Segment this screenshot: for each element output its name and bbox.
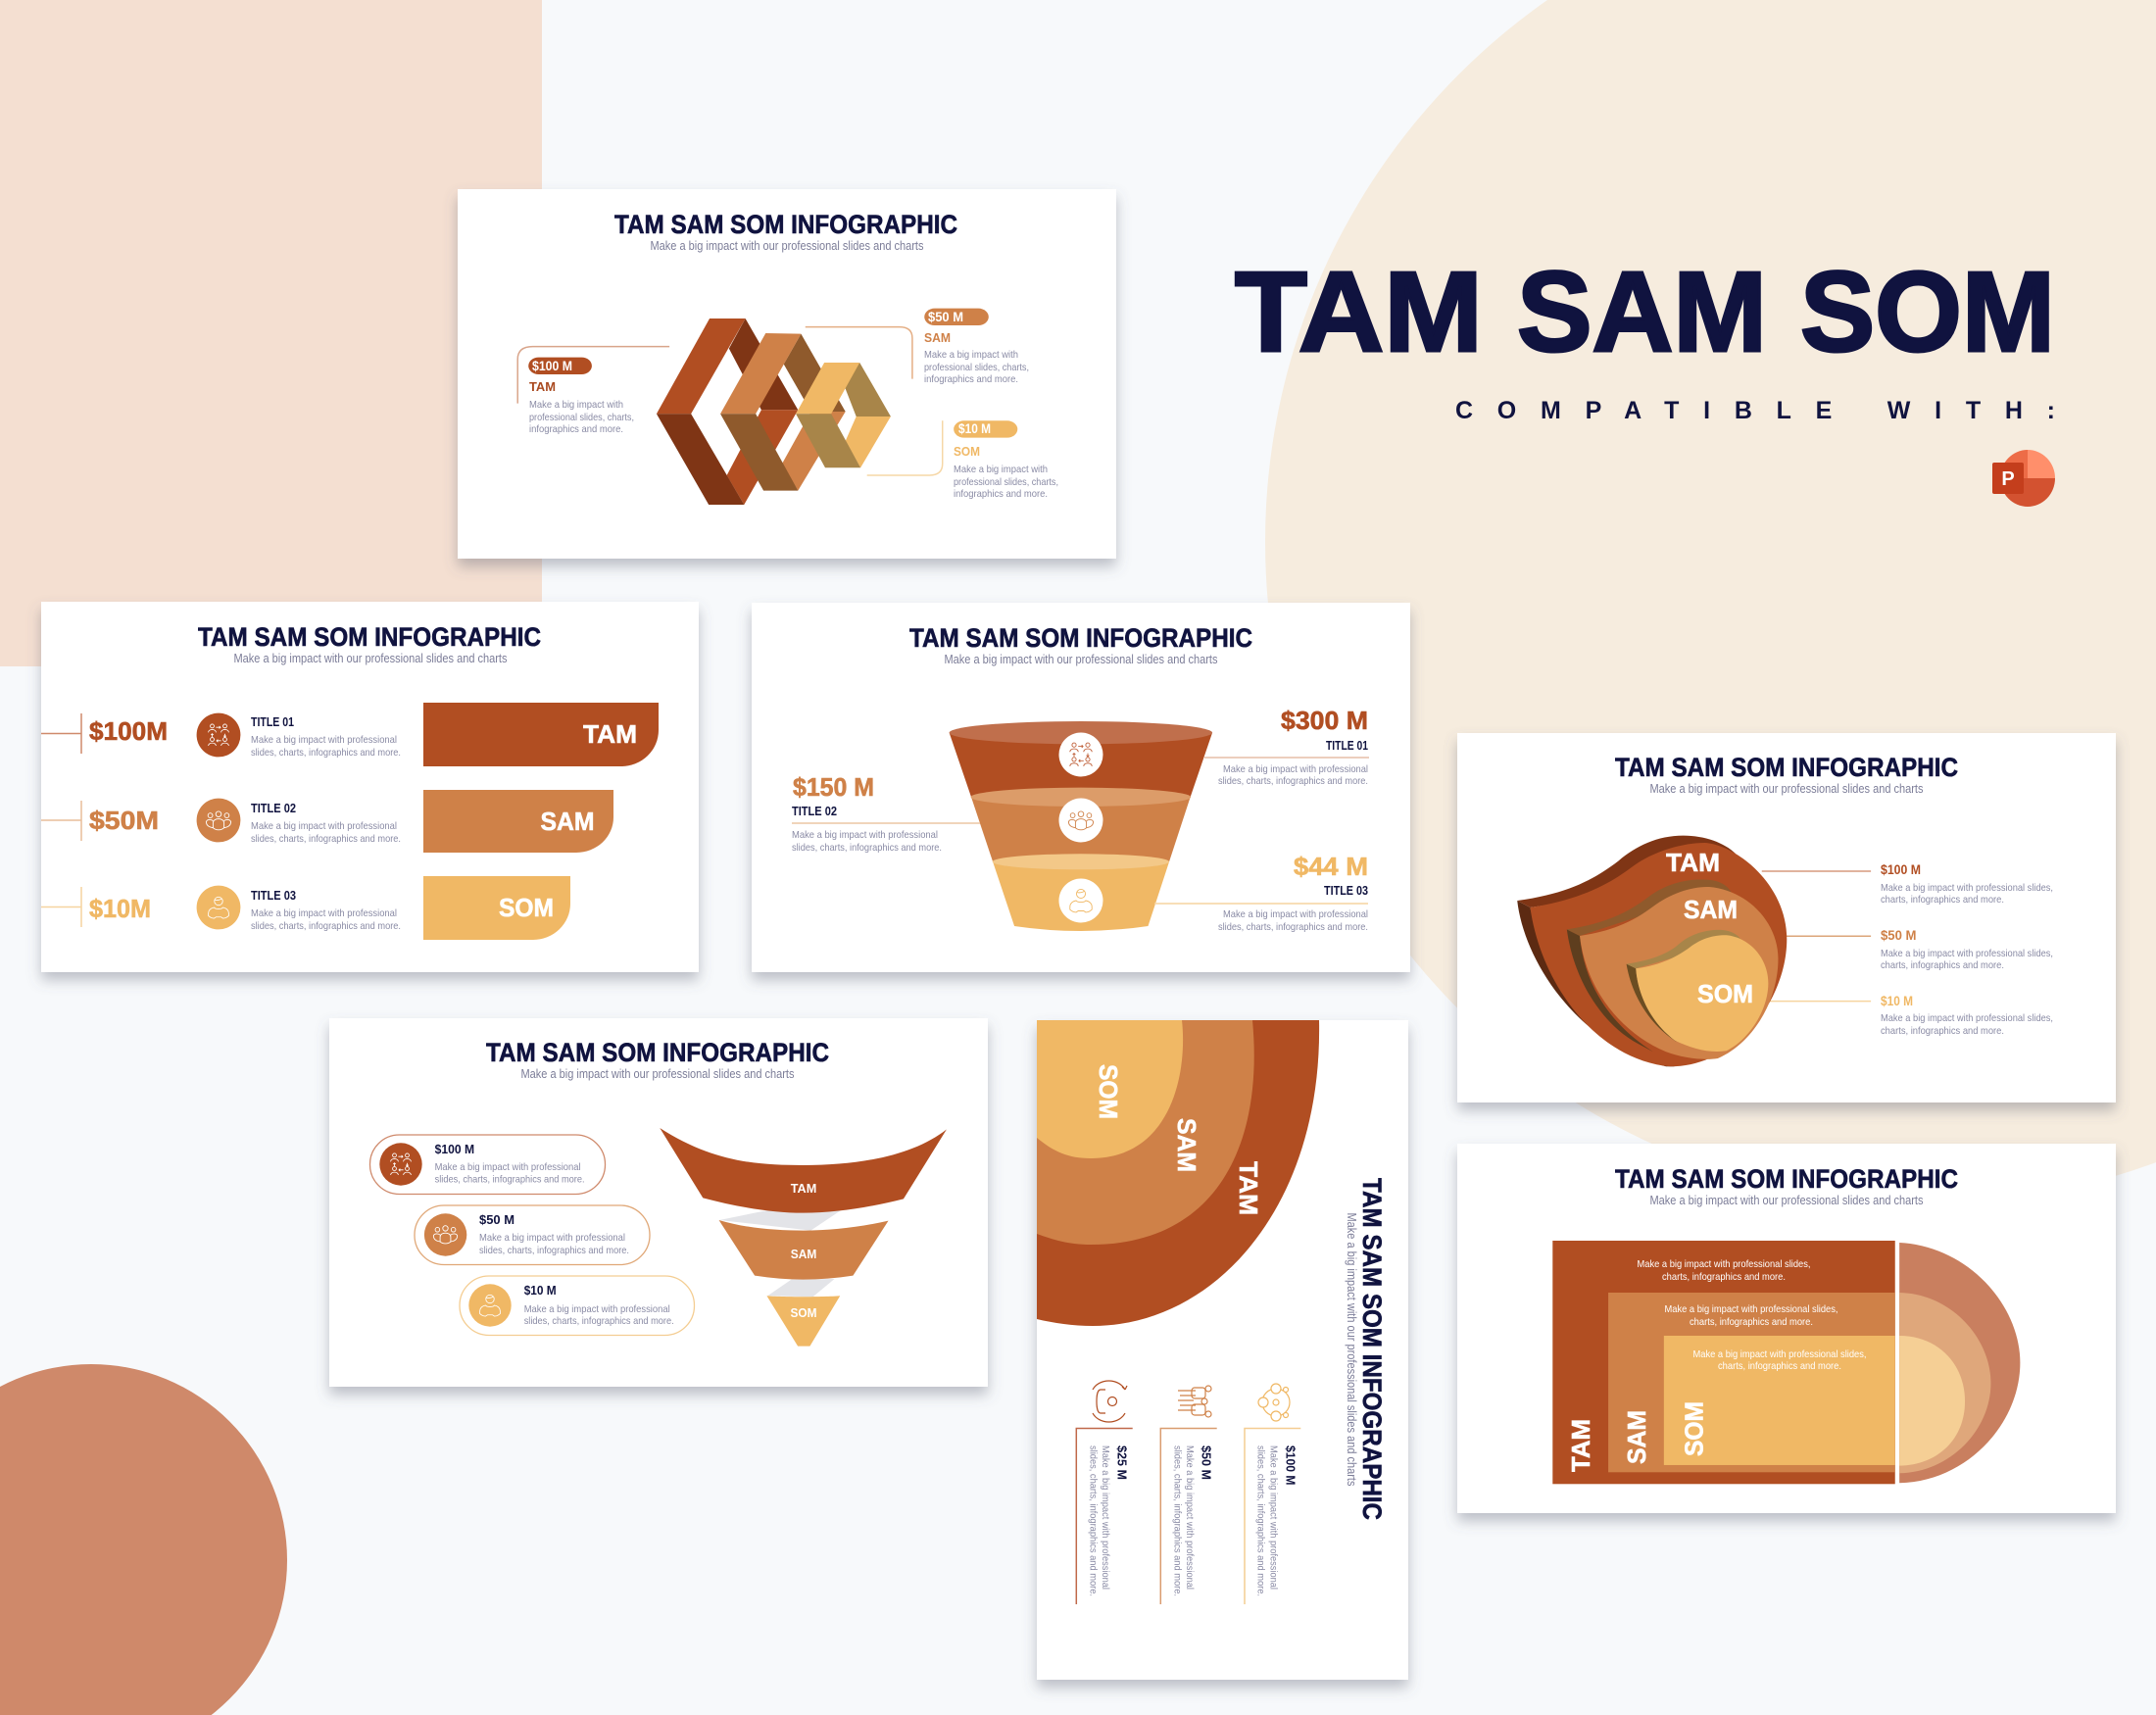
chart: curved funnel: TAM <box>791 1181 816 1196</box>
icon: PowerPoint logo: P <box>2001 468 2015 490</box>
legend: $10 M: $10 M <box>1881 993 1913 1008</box>
row: SOM <box>41 876 570 940</box>
column: $100 M <box>1245 1429 1300 1604</box>
callout: SOM: SOM <box>954 444 980 459</box>
callout: SAM: SAM <box>924 330 951 345</box>
pill: $50 M: $50 M <box>479 1212 514 1227</box>
callout: $300 M: TITLE 01 <box>1326 738 1368 753</box>
callout: $300 M <box>1204 706 1369 787</box>
row: SAM <box>41 790 613 853</box>
legend: $10 M: Make a big impact with professional slides, <box>1881 1012 2053 1024</box>
panel: bars slide <box>41 602 699 972</box>
column: $25 M: Make a big impact with professional <box>1100 1446 1111 1590</box>
pill: $50 M: Make a big impact with professional <box>479 1232 625 1244</box>
slide subtitle: Make a big impact with our professional slides and charts <box>651 239 923 253</box>
row: SAM: SAM <box>541 807 594 836</box>
icon: PowerPoint logo <box>1992 450 2055 507</box>
slide subtitle: Make a big impact with our professional slides and charts <box>1650 782 1923 796</box>
label: SOM vertical: SOM <box>1680 1401 1709 1456</box>
legend: $10 M: charts, infographics and more. <box>1881 1025 2004 1037</box>
callout: TAM: $100 M <box>532 358 572 373</box>
pill: $50 M <box>415 1205 650 1264</box>
text: TAM description: charts, infographics and more. <box>1662 1271 1786 1283</box>
pill: $10 M: Make a big impact with professional <box>524 1303 670 1315</box>
label: SAM: SAM <box>1684 895 1738 924</box>
panel: nested rectangles slide <box>1457 1144 2116 1513</box>
slide title: TAM SAM SOM INFOGRAPHIC <box>198 622 541 652</box>
legend: $100 M: $100 M <box>1881 861 1921 877</box>
main heading <box>1235 248 2055 375</box>
column: $50 M: slides, charts, infographics and more. <box>1171 1446 1183 1596</box>
callout: TAM: infographics and more. <box>529 423 623 435</box>
pill: $10 M <box>460 1276 694 1335</box>
slide title: TAM SAM SOM INFOGRAPHIC <box>909 623 1252 653</box>
callout: SOM: professional slides, charts, <box>954 476 1058 488</box>
callout: $300 M: slides, charts, infographics and more. <box>1218 775 1368 787</box>
row: SAM: slides, charts, infographics and more. <box>251 833 401 845</box>
pill: $100 M: $100 M <box>435 1142 474 1156</box>
column: $100 M: $100 M <box>1283 1446 1298 1486</box>
chart: curved funnel: SOM <box>790 1305 817 1320</box>
callout: $150 M: TITLE 02 <box>792 804 837 818</box>
row: TAM: Make a big impact with professional <box>251 734 397 746</box>
callout: TAM: professional slides, charts, <box>529 412 634 423</box>
row: SOM: slides, charts, infographics and more. <box>251 920 401 932</box>
background: peach block <box>0 0 542 666</box>
chart: curved funnel <box>660 1128 947 1347</box>
row: TAM <box>41 703 659 766</box>
icon: cycle person <box>1093 1381 1127 1422</box>
text: TAM description <box>1637 1258 1811 1283</box>
column: $50 M: Make a big impact with professional <box>1184 1446 1196 1590</box>
row: TAM: TAM <box>583 719 637 749</box>
text: SOM description: charts, infographics and more. <box>1718 1360 1841 1372</box>
slide subtitle: Make a big impact with our professional slides and charts <box>1650 1194 1923 1207</box>
callout: $150 M <box>792 772 980 854</box>
chart: curved funnel: SAM <box>791 1247 816 1261</box>
slide title rotated: TAM SAM SOM INFOGRAPHIC <box>1357 1178 1387 1520</box>
label: SAM vertical: SAM <box>1622 1410 1651 1464</box>
callout: TAM: Make a big impact with <box>529 399 623 411</box>
row: SAM: $50M <box>89 806 159 835</box>
chart: concentric arcs <box>1037 1020 1319 1326</box>
row: SOM: TITLE 03 <box>251 888 296 903</box>
chart: nested rectangles with arcs <box>1552 1241 2020 1484</box>
legend: $10 M <box>1881 993 2053 1037</box>
icon: person <box>1058 878 1103 923</box>
label: TAM rotated: TAM <box>1234 1161 1263 1215</box>
subheading: COMPATIBLE WITH: <box>1455 397 2055 424</box>
slide title: TAM SAM SOM INFOGRAPHIC <box>1615 753 1958 782</box>
row: TAM: TITLE 01 <box>251 714 294 729</box>
text: SOM description: Make a big impact with professional slides, <box>1693 1348 1866 1360</box>
column: $25 M: slides, charts, infographics and more. <box>1087 1446 1099 1596</box>
chart: cone funnel <box>950 721 1212 931</box>
callout: SAM: $50 M <box>928 309 963 324</box>
row: SAM: Make a big impact with professional <box>251 820 397 832</box>
background: beige circle <box>1265 0 2156 1203</box>
callout: SAM <box>924 309 1029 385</box>
label: TAM vertical: TAM <box>1566 1419 1595 1472</box>
row: TAM: $100M <box>89 716 168 746</box>
callout: $300 M: Make a big impact with professional <box>1223 763 1368 775</box>
slide title: TAM SAM SOM INFOGRAPHIC <box>1615 1164 1958 1194</box>
legend: $100 M <box>1881 861 2053 906</box>
column: $25 M: $25 M <box>1115 1446 1130 1480</box>
slide subtitle: Make a big impact with our professional slides and charts <box>233 652 508 665</box>
callout: $300 M: $300 M <box>1281 706 1368 735</box>
callout: $150 M: Make a big impact with professional <box>792 829 938 841</box>
icon: hands and network <box>1178 1386 1211 1417</box>
row: SOM: Make a big impact with professional <box>251 907 397 919</box>
column: $25 M <box>1076 1429 1133 1604</box>
text: TAM description: Make a big impact with professional slides, <box>1637 1258 1811 1270</box>
background: terracotta circle <box>0 1364 287 1715</box>
text: SAM description <box>1664 1303 1838 1328</box>
pill: $10 M: slides, charts, infographics and more. <box>524 1315 674 1327</box>
legend: $50 M: charts, infographics and more. <box>1881 959 2004 971</box>
callout: $150 M: $150 M <box>793 772 874 802</box>
slide subtitle: Make a big impact with our professional slides and charts <box>945 653 1217 666</box>
callout: $44 M: TITLE 03 <box>1324 883 1368 898</box>
label: SOM rotated: SOM <box>1094 1064 1123 1119</box>
panel: pill funnel slide <box>329 1018 988 1387</box>
chart: interlocked hexagons <box>517 309 1017 505</box>
callout: $44 M: Make a big impact with professional <box>1223 908 1368 920</box>
label: SAM rotated: SAM <box>1172 1118 1201 1172</box>
row: SOM: $10M <box>89 894 151 923</box>
main heading: TAM <box>1235 248 1483 375</box>
panel: shield slide <box>1457 733 2116 1102</box>
icon: team <box>1058 733 1103 776</box>
callout: $44 M <box>1154 852 1368 933</box>
callout: SOM <box>954 420 1058 500</box>
main heading: SAM <box>1517 248 1767 375</box>
pill: $100 M: Make a big impact with professional <box>435 1161 581 1173</box>
pill: $100 M <box>370 1135 606 1194</box>
label: TAM: TAM <box>1666 848 1720 877</box>
column: $100 M: Make a big impact with professional <box>1268 1446 1280 1590</box>
panel: cone funnel slide <box>752 603 1410 972</box>
callout: SAM: Make a big impact with <box>924 349 1018 361</box>
row: SAM: TITLE 02 <box>251 801 296 815</box>
pill: $10 M: $10 M <box>524 1283 557 1298</box>
icon: people ring <box>1258 1384 1290 1421</box>
column: $50 M: $50 M <box>1200 1446 1214 1480</box>
legend: $100 M: Make a big impact with professional slides, <box>1881 882 2053 894</box>
panel: hexagon slide <box>458 189 1116 559</box>
slide title: TAM SAM SOM INFOGRAPHIC <box>614 210 957 239</box>
icon: group <box>1058 798 1103 843</box>
main heading: SOM <box>1800 248 2055 375</box>
callout: SOM: Make a big impact with <box>954 464 1048 475</box>
slide title: TAM SAM SOM INFOGRAPHIC <box>486 1038 829 1067</box>
callout: SAM: professional slides, charts, <box>924 362 1029 373</box>
legend: $100 M: charts, infographics and more. <box>1881 894 2004 906</box>
slide subtitle rotated: Make a big impact with our professional slides and charts <box>1345 1213 1358 1486</box>
callout: $44 M: $44 M <box>1294 852 1368 881</box>
column: $100 M: slides, charts, infographics and more. <box>1254 1446 1266 1596</box>
text: SAM description: Make a big impact with professional slides, <box>1664 1303 1838 1315</box>
slide subtitle: Make a big impact with our professional slides and charts <box>521 1067 794 1081</box>
row: TAM: slides, charts, infographics and more. <box>251 747 401 759</box>
callout: SOM: $10 M <box>958 420 991 436</box>
callout: TAM: TAM <box>529 379 556 394</box>
column: $50 M <box>1160 1429 1217 1604</box>
callout: TAM <box>529 358 634 435</box>
callout: SOM: infographics and more. <box>954 488 1048 500</box>
callout: $44 M: slides, charts, infographics and more. <box>1218 921 1368 933</box>
panel: rotated arcs slide <box>1037 1020 1408 1680</box>
callout: $150 M: slides, charts, infographics and more. <box>792 842 942 854</box>
row: SOM: SOM <box>499 893 554 922</box>
legend: $50 M: Make a big impact with professional slides, <box>1881 948 2053 959</box>
legend: $50 M: $50 M <box>1881 927 1917 943</box>
legend: $50 M <box>1881 927 2053 971</box>
callout: SAM: infographics and more. <box>924 373 1018 385</box>
pill: $100 M: slides, charts, infographics and more. <box>435 1174 585 1186</box>
chart: nested shields <box>1517 836 1871 1066</box>
text: SOM description <box>1693 1348 1866 1372</box>
label: SOM: SOM <box>1697 979 1753 1008</box>
text: SAM description: charts, infographics and more. <box>1690 1316 1813 1328</box>
pill: $50 M: slides, charts, infographics and more. <box>479 1245 629 1256</box>
